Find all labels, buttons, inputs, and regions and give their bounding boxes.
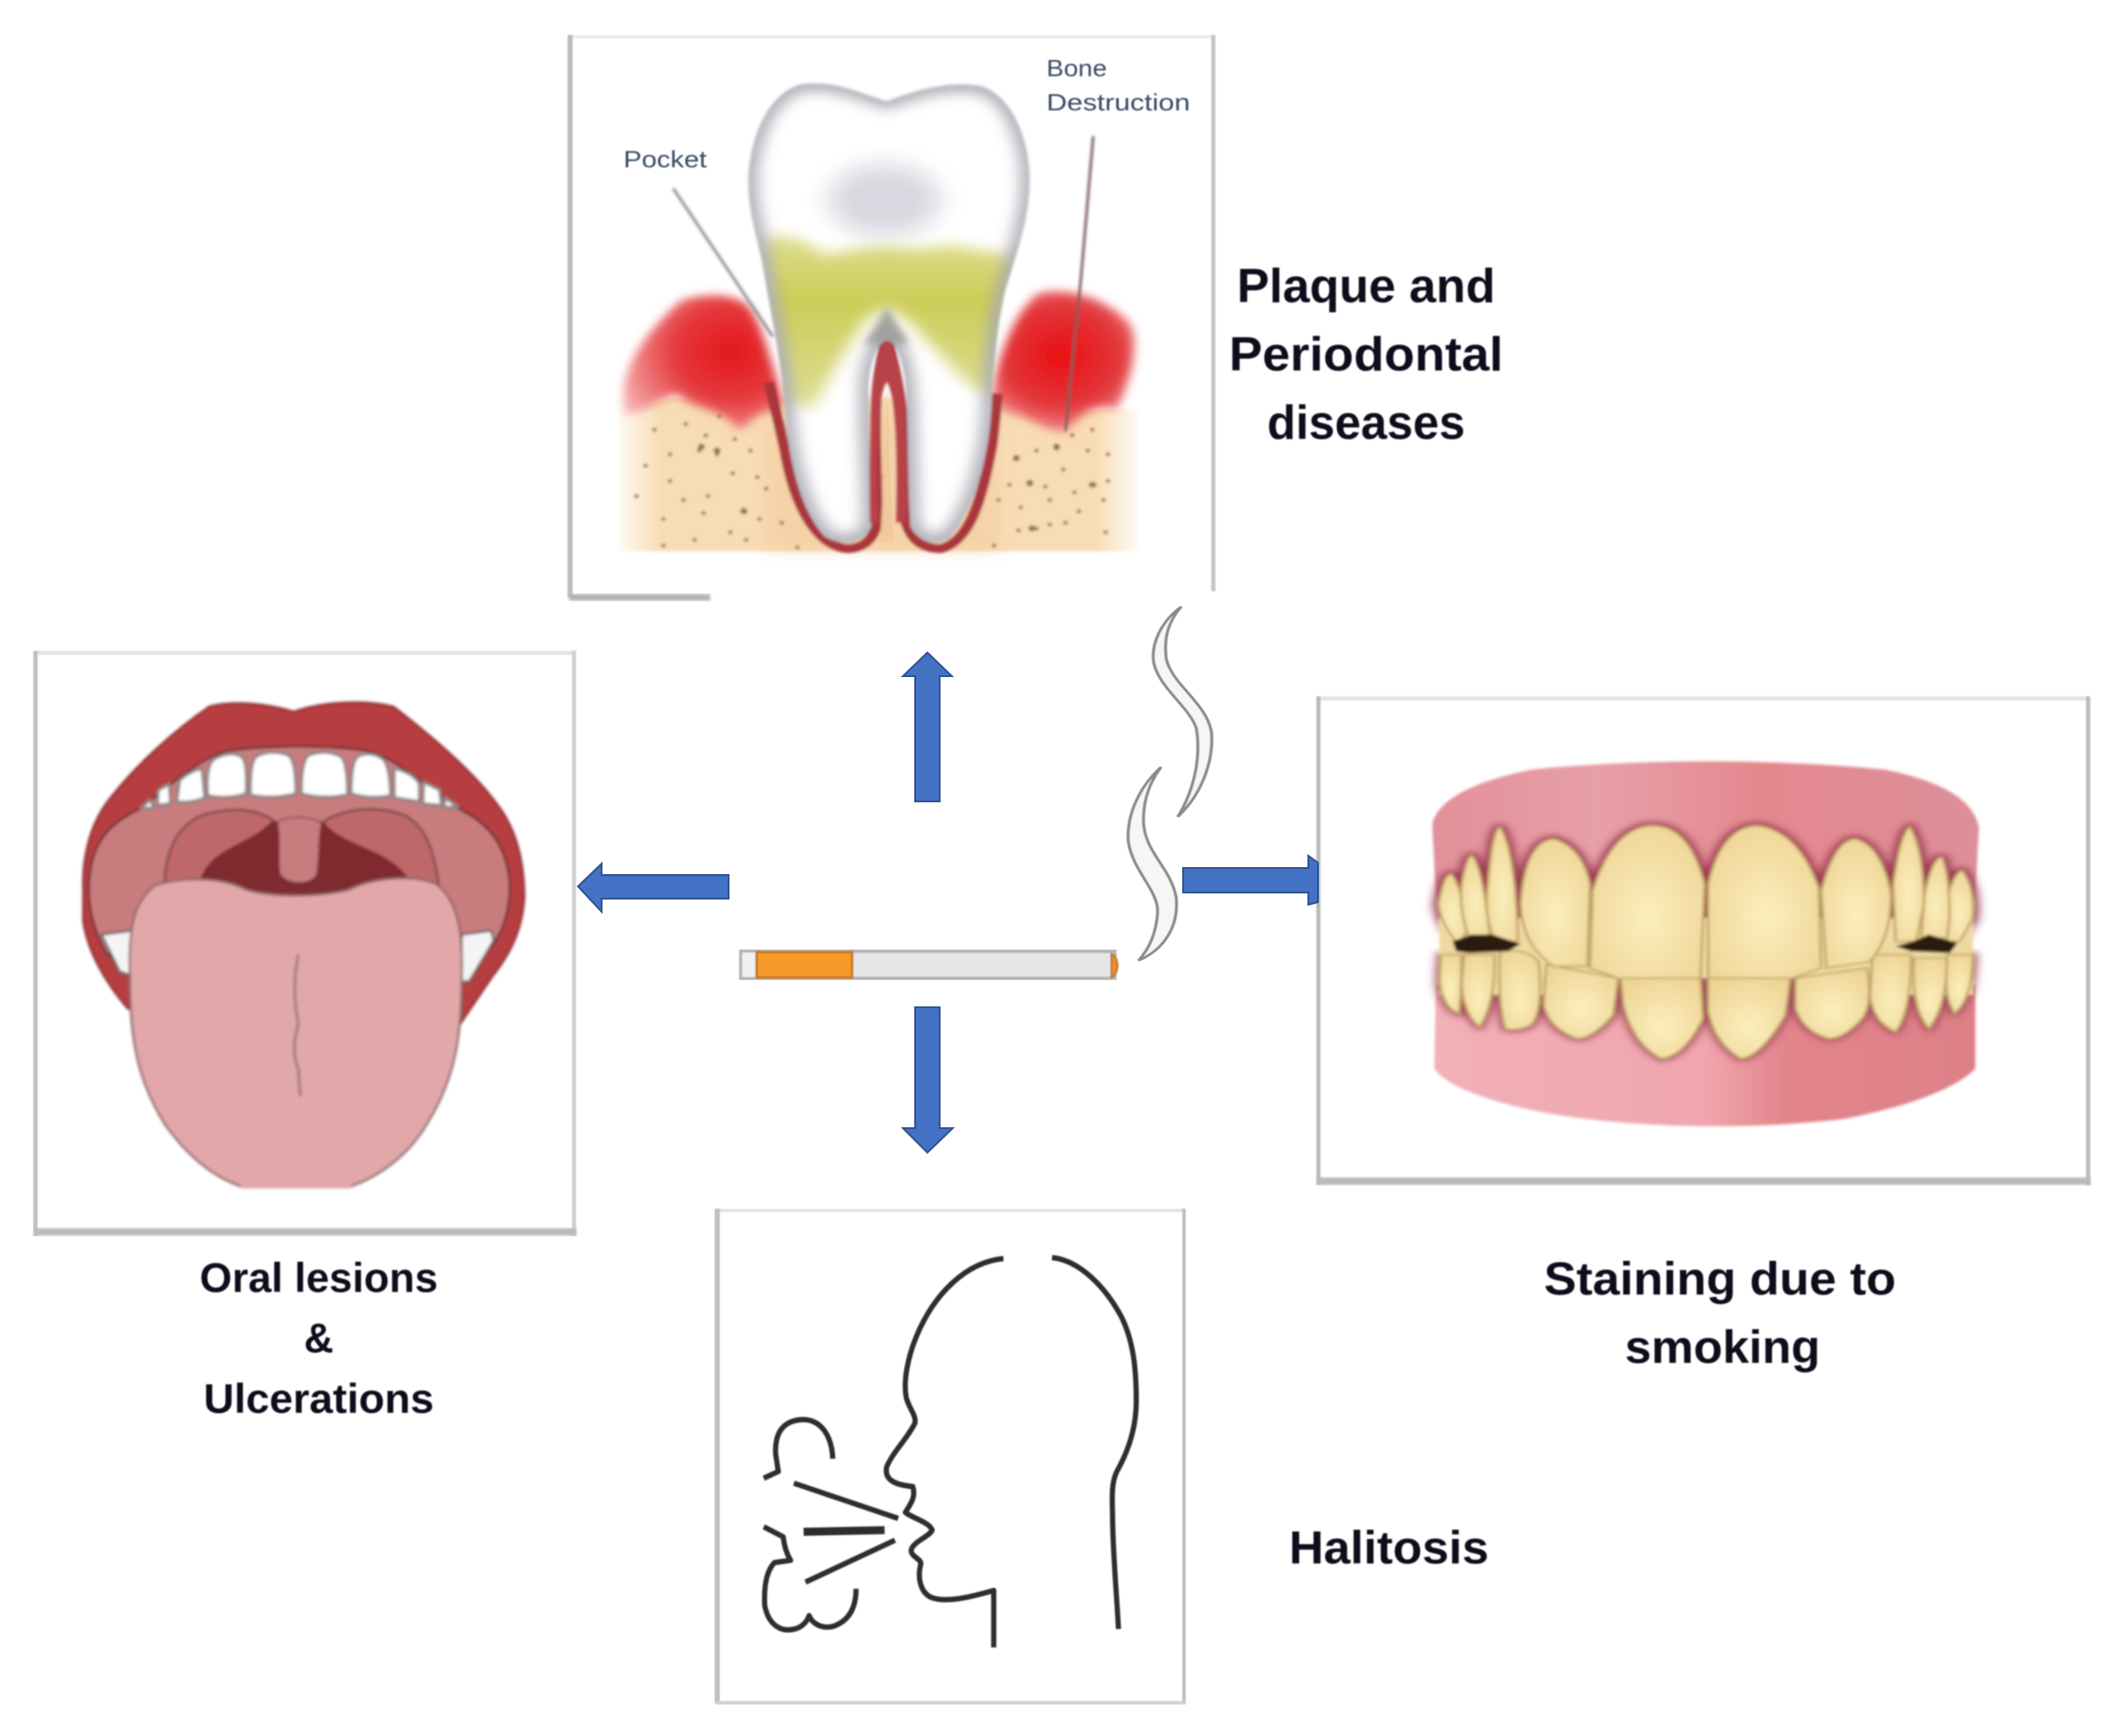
heading: plaque and periodontal diseases: diseases [1267,395,1465,449]
arrow: up [903,653,952,801]
arrow: left [578,864,729,912]
label: Bone Destruction: Destruction [1046,89,1190,116]
panel: halitosis [715,1209,1186,1704]
illustration: stained teeth [1433,761,1979,1126]
heading: staining due to smoking: Staining due to [1544,1253,1896,1305]
lower teeth [1440,950,1973,1059]
heading: staining due to smoking: smoking [1625,1322,1820,1373]
illustration: head exhaling bad breath [764,1258,1137,1648]
heading: oral lesions and ulcerations: & [304,1315,334,1361]
label: Pocket: Pocket [624,146,708,173]
panel: plaque and periodontal diseases [567,35,1216,601]
heading: oral lesions and ulcerations: Oral lesions [200,1254,438,1301]
cigarette [741,951,1117,978]
arrow: down [903,1007,953,1153]
tartar stains [1453,935,1957,953]
heading: halitosis: Halitosis [1289,1522,1489,1574]
heading: oral lesions and ulcerations: Ulcerations [203,1375,434,1422]
tongue fissure [294,954,300,1096]
heading: plaque and periodontal diseases [1230,258,1503,449]
heading: plaque and periodontal diseases: Plaque and [1237,258,1496,313]
label: Bone Destruction [1046,55,1190,116]
label: Bone Destruction: Bone [1046,55,1107,81]
panel: oral lesions [33,651,576,1236]
heading: oral lesions and ulcerations [200,1254,438,1422]
cigarette smoke [1128,607,1212,961]
heading: plaque and periodontal diseases: Periodontal [1230,327,1503,381]
upper teeth [1439,826,1973,978]
leader line: pocket [673,188,773,336]
arrow: right [1183,856,1318,905]
panel: staining due to smoking [1316,696,2090,1185]
illustration: tooth with periodontal disease [619,83,1137,551]
leader line: bone destruction [1066,136,1093,432]
illustration: open mouth and tongue [83,702,525,1187]
heading: staining due to smoking [1544,1253,1896,1373]
